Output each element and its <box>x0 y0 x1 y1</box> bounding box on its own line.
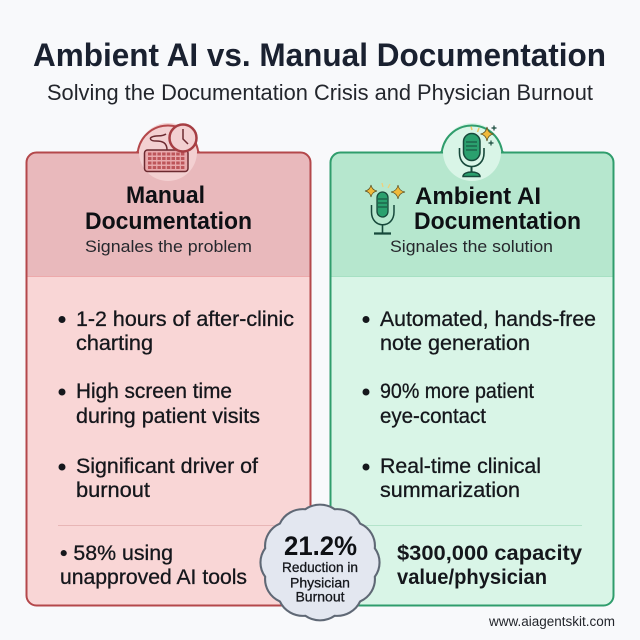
stat: unapproved AI tools: • 58% using <box>60 542 173 565</box>
bullet: after-clinic charting: charting <box>76 332 153 355</box>
bullet: burnout driver: burnout <box>76 479 150 502</box>
bullet: eye contact: 90% more patient <box>380 380 534 403</box>
panel heading: manual <box>85 182 252 235</box>
bullet: summarization <box>362 455 541 502</box>
bullet: note generation <box>362 308 596 355</box>
panel heading: manual: Documentation <box>85 208 252 235</box>
badge value: 21.2% <box>284 531 357 561</box>
bullet: eye contact: eye-contact <box>380 405 486 428</box>
panel: manual documentation <box>26 123 310 606</box>
bullet: burnout driver: Significant driver of <box>76 455 258 478</box>
stat: unapproved AI tools <box>60 542 247 589</box>
panel: ambient AI documentation <box>330 123 614 606</box>
panel heading: ambient: Documentation <box>414 208 581 235</box>
bullet: screen time: High screen time <box>76 380 232 403</box>
subtitle: Solving the Documentation Crisis and Physician Burnout <box>47 80 594 105</box>
badge label: Burnout <box>295 588 345 604</box>
icon: keyboard and clock <box>134 123 202 181</box>
stat: capacity value: $300,000 capacity <box>397 542 582 565</box>
panel header: manual <box>27 152 310 276</box>
bullet: summarization: Real-time clinical <box>380 455 541 478</box>
website credit: www.aiagentskit.com <box>488 614 615 629</box>
bullet: screen time: during patient visits <box>76 405 260 428</box>
icon: header microphone <box>365 183 405 234</box>
panel heading: ambient: Ambient AI <box>415 183 541 210</box>
bullet: note generation: Automated, hands-free <box>380 308 596 331</box>
bullet: screen time <box>58 380 260 428</box>
panel subheading: manual: Signales the problem <box>85 237 252 256</box>
bullet: burnout driver <box>58 455 258 502</box>
badge label: Reduction in <box>282 559 358 575</box>
title: Ambient AI vs. Manual Documentation <box>33 37 606 73</box>
panel heading: ambient <box>414 183 581 235</box>
callout: burnout reduction badge <box>260 505 380 620</box>
bullet: summarization: summarization <box>380 479 520 502</box>
badge shape <box>260 505 380 620</box>
stat: unapproved AI tools: unapproved AI tools <box>60 566 247 589</box>
bullet: after-clinic charting: 1-2 hours of after-clinic <box>76 308 294 331</box>
icon: microphone with sparkles <box>438 123 506 181</box>
bullet: after-clinic charting <box>58 308 294 355</box>
panel subheading: ambient: Signales the solution <box>390 237 553 256</box>
panel heading: manual: Manual <box>126 182 205 209</box>
stat: capacity value: value/physician <box>397 566 547 589</box>
bullet: note generation: note generation <box>380 332 530 355</box>
stat: capacity value <box>397 542 582 589</box>
panel background: ambient <box>330 152 614 606</box>
panel background: manual <box>26 152 310 606</box>
badge label: Physician <box>290 574 350 590</box>
badge label <box>282 559 358 604</box>
panel header: ambient <box>331 152 613 276</box>
bullet: eye contact <box>362 380 534 428</box>
